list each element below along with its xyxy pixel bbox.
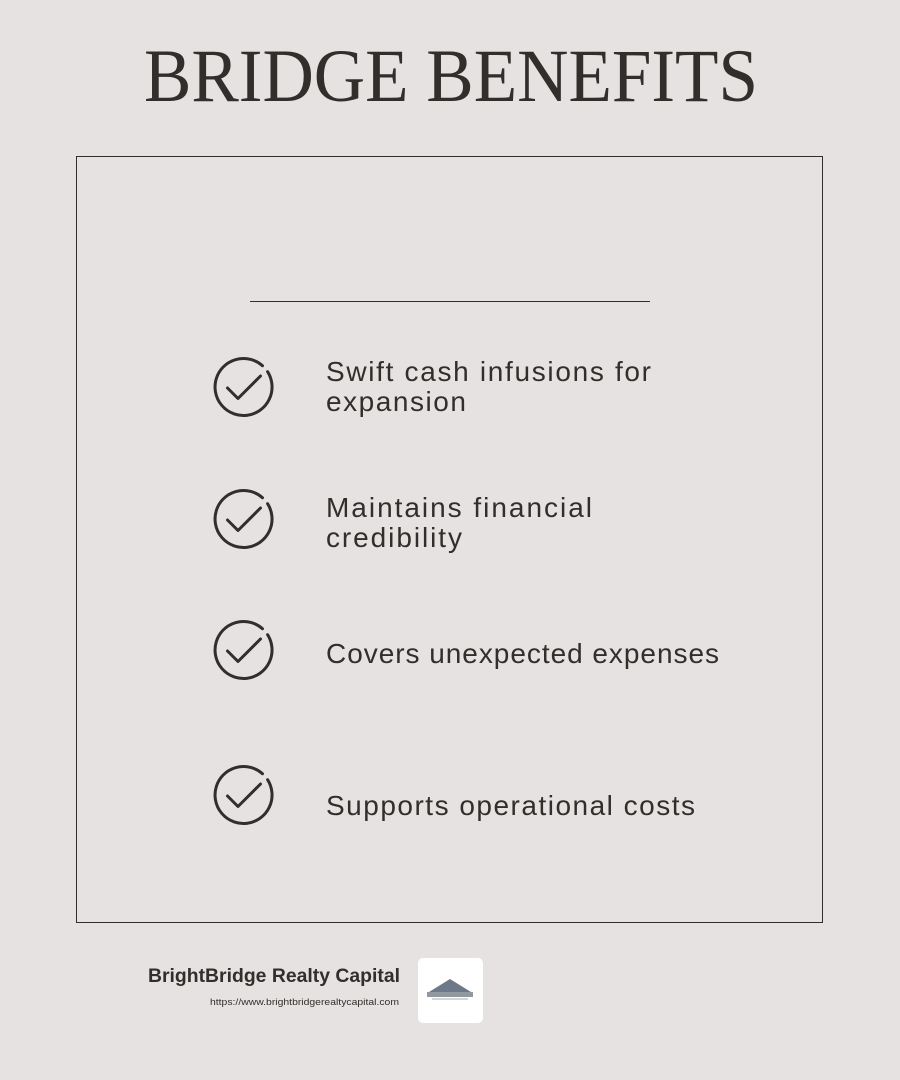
icon: check circle 3 [215, 621, 272, 678]
benefit text 1: Swift cash infusions for [326, 356, 651, 387]
icon: check circle 4 [215, 766, 272, 823]
benefit text 2: Maintains financial [326, 492, 592, 523]
benefit text 2, second line: credibility [326, 522, 462, 553]
panel: benefits list [76, 156, 822, 922]
icon: check circle 1 [215, 358, 272, 415]
website url: https://www.brightbridgerealtycapital.com [210, 997, 399, 1008]
logo [418, 958, 483, 1023]
benefit text 1, second line: expansion [326, 386, 466, 417]
benefit text 4: Supports operational costs [326, 790, 695, 821]
benefit text 3: Covers unexpected expenses [326, 638, 719, 669]
company name: BrightBridge Realty Capital [148, 966, 400, 987]
title: BRIDGE BENEFITS [144, 35, 758, 118]
icon: check circle 2 [215, 490, 272, 547]
